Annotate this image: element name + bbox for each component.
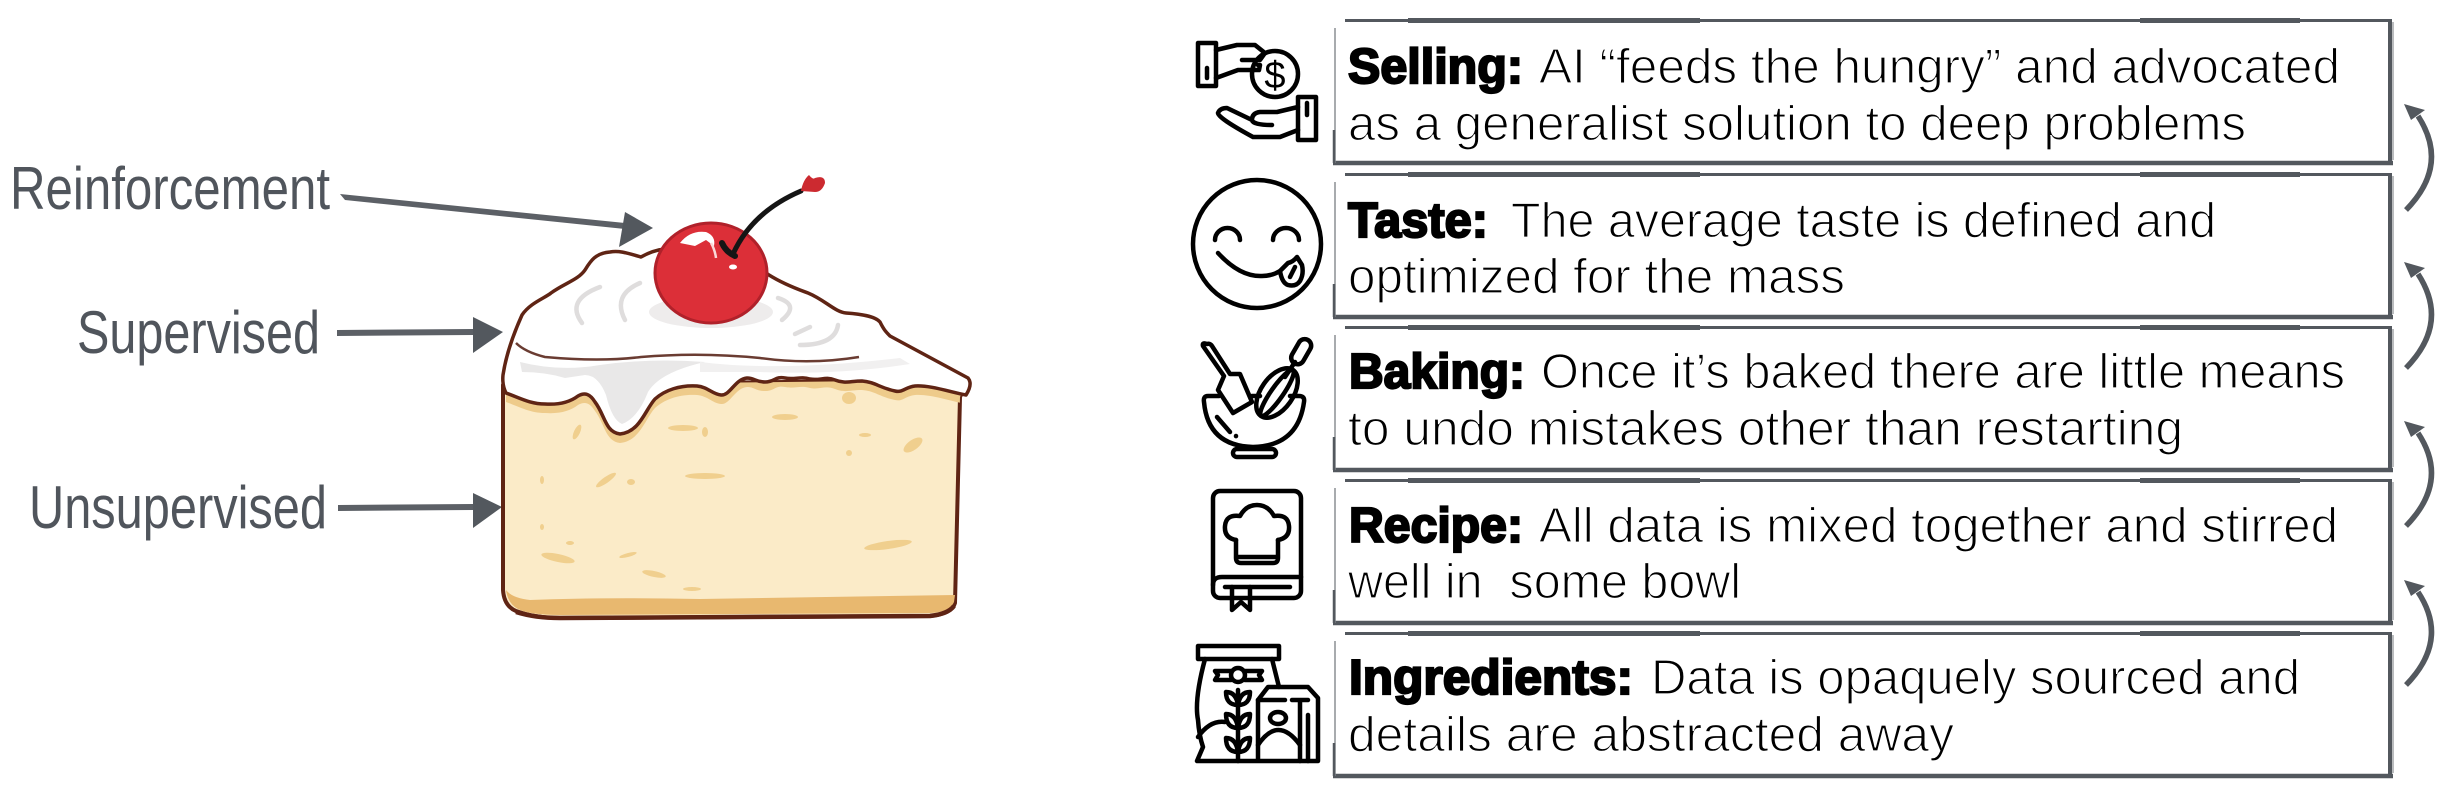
text: Baking line 1: Once it’s baked there are little means — [1541, 345, 2345, 399]
tan shadow under icing — [506, 382, 961, 443]
icing swirl marks — [576, 283, 838, 345]
text: Recipe line 2: well in some bowl — [1347, 555, 1741, 609]
border: Baking — [1333, 328, 2393, 470]
heading: Baking: Baking: — [1349, 345, 1525, 399]
icing — [503, 240, 970, 434]
text: Taste line 2: optimized for the mass — [1348, 250, 1845, 304]
panel: Selling — [1333, 20, 2393, 163]
text: Ingredients line 1: Data is opaquely sourced and — [1651, 651, 2300, 705]
seam line in icing — [516, 343, 859, 361]
arrow: Baking to Taste — [2404, 262, 2431, 368]
heading: Taste: Taste: — [1348, 194, 1488, 248]
panel: Recipe — [1333, 480, 2393, 623]
border: Recipe — [1333, 480, 2393, 623]
label: Supervised: Supervised — [77, 299, 320, 366]
panel: Baking — [1333, 328, 2393, 470]
heading: Recipe: Recipe: — [1349, 499, 1523, 553]
icon: flour bag and box (ingredients) — [1197, 646, 1318, 761]
icing shaded lower band — [520, 361, 705, 424]
text: Baking line 2: to undo mistakes other than restarting — [1348, 402, 2183, 456]
illustration: cake slice — [503, 175, 970, 618]
arrow: Ingredients to Recipe — [2404, 580, 2431, 685]
stem tip — [801, 175, 825, 192]
panel: Ingredients — [1333, 634, 2393, 776]
cherry stem — [733, 191, 801, 254]
arrow: Unsupervised to cake — [338, 493, 502, 528]
border: Taste — [1333, 174, 2393, 317]
icon: dollar sign: $ — [1264, 55, 1286, 97]
border: Ingredients — [1333, 634, 2393, 776]
text: Ingredients line 2: details are abstracted away — [1348, 708, 1955, 762]
arrow: Supervised to icing — [337, 317, 503, 353]
label: Unsupervised: Unsupervised — [29, 474, 327, 541]
text: Recipe line 1: All data is mixed together and stirred — [1539, 499, 2338, 553]
cake body — [503, 380, 968, 618]
icon: hands and coin (selling) — [1198, 43, 1316, 140]
icon: bowl and whisk (baking) — [1203, 337, 1314, 457]
icon: chef recipe book (recipe) — [1213, 491, 1301, 610]
text: Selling line 1: AI “feeds the hungry” and advocated — [1539, 40, 2340, 94]
arrow: Recipe to Baking — [2404, 421, 2431, 526]
border: Selling — [1333, 20, 2393, 163]
panel: Taste — [1333, 174, 2393, 317]
text: Selling line 2: as a generalist solution to deep problems — [1348, 97, 2246, 151]
bottom crust — [506, 590, 955, 615]
heading: Ingredients: Ingredients: — [1349, 651, 1633, 705]
crumbs — [540, 392, 925, 591]
text: Taste line 1: The average taste is defined and — [1511, 194, 2216, 248]
arrow: Taste to Selling — [2404, 104, 2431, 210]
icon: smiling face with tongue (taste) — [1193, 180, 1321, 308]
cherry — [655, 223, 767, 323]
heading: Selling: Selling: — [1348, 40, 1523, 94]
label: Reinforcement: Reinforcement — [10, 155, 330, 222]
arrow: Reinforcement to cherry — [340, 194, 653, 247]
